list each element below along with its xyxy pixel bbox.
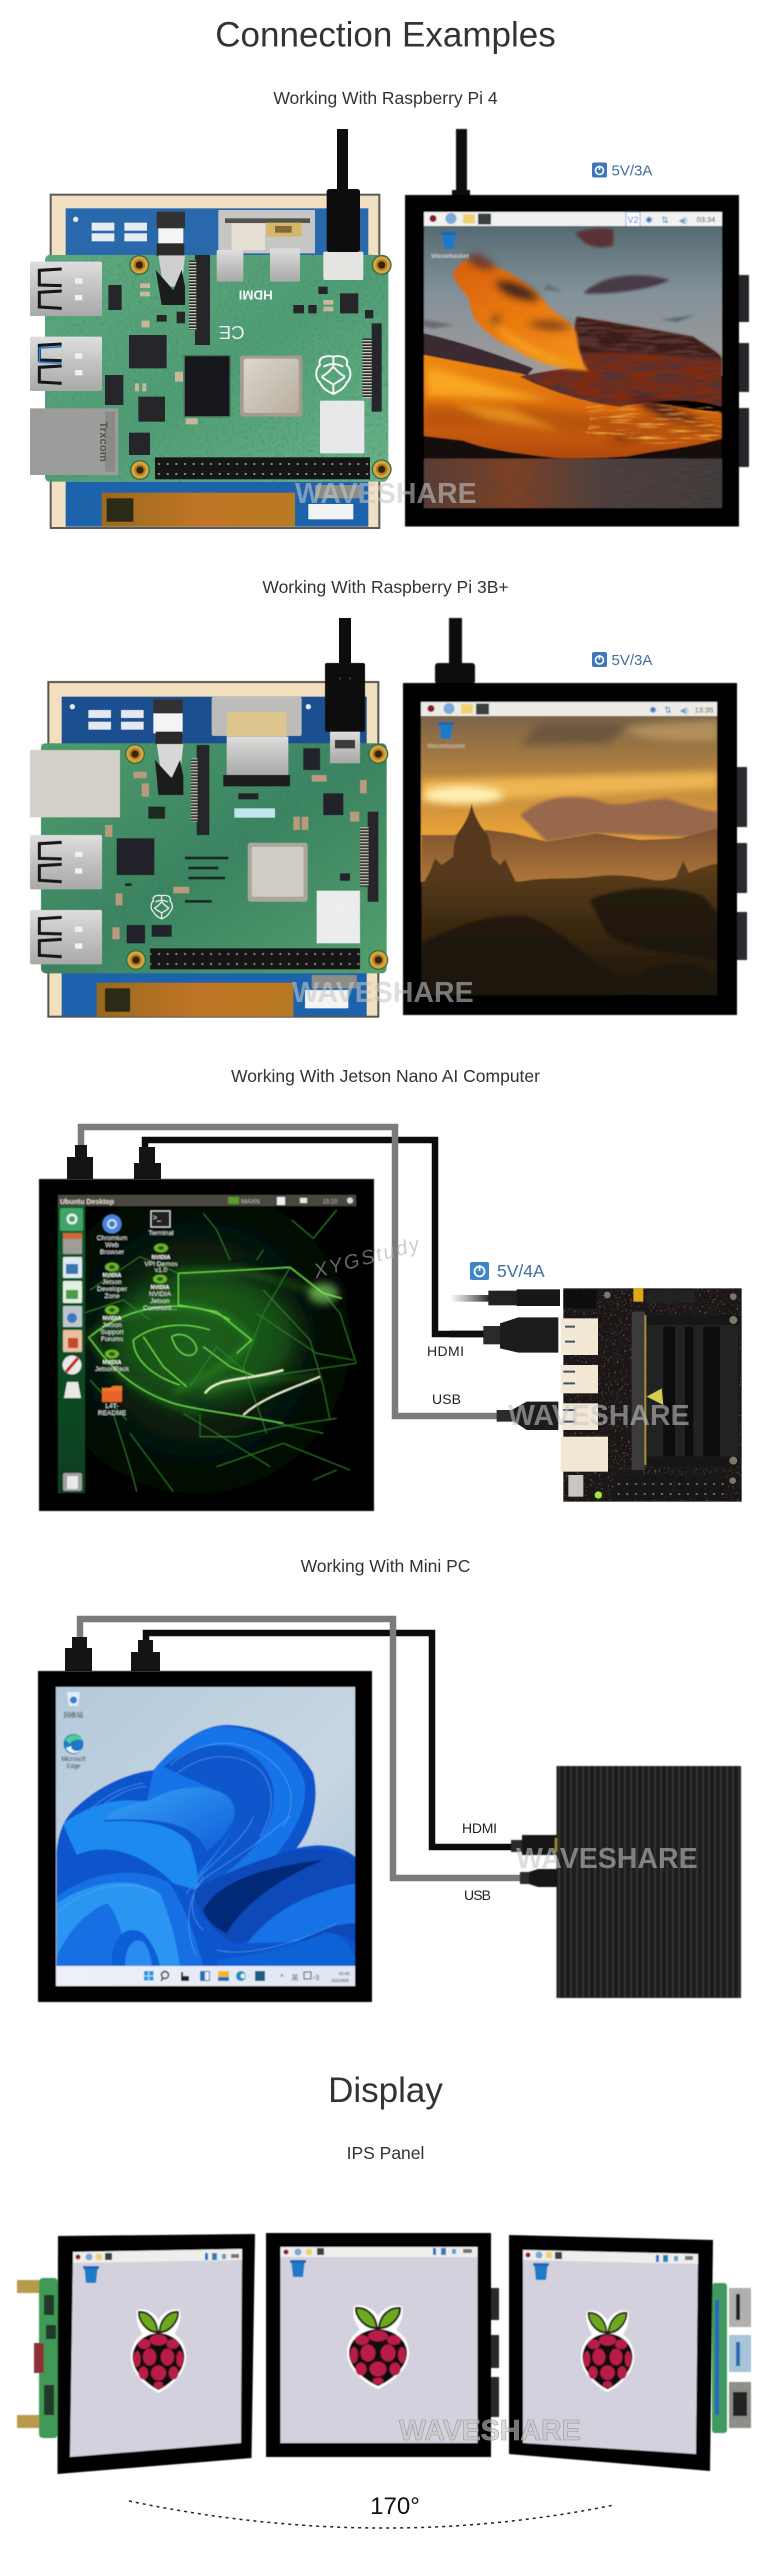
taskbar: ◀) <box>680 706 689 715</box>
terminal icon <box>149 1211 174 1237</box>
SoC <box>248 843 308 902</box>
carrier board bottom <box>62 973 367 1016</box>
support forum icon <box>100 1306 124 1343</box>
inner petal <box>163 1745 274 1890</box>
label HDMI: HDMI <box>427 1343 464 1359</box>
panel: Raspberry Pi 4 mounted on display back <box>30 189 392 528</box>
bright petal <box>103 1788 235 1852</box>
support forum icon: Support <box>100 1329 124 1336</box>
display back frame <box>48 682 378 1017</box>
brown shaded band <box>424 407 722 438</box>
HDMI connector <box>511 1835 557 1855</box>
support forum icon: Forums <box>101 1336 124 1343</box>
chips <box>105 285 373 455</box>
yellow streaks <box>427 367 560 430</box>
support forum icon: NVIDIA <box>103 1316 121 1322</box>
taskbar: ⇅ <box>661 215 669 225</box>
pagoda wallpaper <box>420 715 720 995</box>
dark band cloud <box>423 333 534 376</box>
micro USB cable above the Pi 3B+ board <box>339 618 351 665</box>
ethernet port <box>30 750 120 817</box>
viewing angle label: 170° <box>370 2493 420 2520</box>
USB ports <box>30 262 102 316</box>
panel: centre view <box>266 2233 499 2457</box>
cables: grey USB and black HDMI <box>80 1619 525 1878</box>
terminal icon: Terminal <box>149 1230 174 1237</box>
display FPC connector <box>362 323 382 412</box>
glowing sky <box>420 715 720 882</box>
warning triangle <box>647 1388 663 1405</box>
top bar <box>523 2250 698 2264</box>
community icon: Communi... <box>143 1305 177 1312</box>
HDMI black <box>146 1633 515 1847</box>
USB port 2 <box>30 910 102 964</box>
taskbar: 2022/5/5 <box>331 1978 349 1983</box>
HDMI adapter <box>218 210 315 253</box>
plugs on display <box>65 1637 160 1671</box>
power cable and plug <box>450 1289 560 1306</box>
watermark: WAVESHARE <box>292 977 474 1009</box>
bezel <box>39 1179 374 1511</box>
support forum icon: Jetson <box>102 1322 122 1329</box>
taskbar: V2 <box>627 215 639 225</box>
L4T folder: README <box>98 1410 127 1417</box>
power jack <box>563 1290 597 1308</box>
micro HDMI ports <box>217 248 300 282</box>
sky <box>423 226 723 376</box>
yellow jumper <box>633 1288 643 1302</box>
HDMI black cable <box>145 1140 490 1334</box>
HDMI connector <box>450 1317 558 1353</box>
plugs on display <box>67 1145 161 1179</box>
taskbar: ✱ <box>649 705 657 715</box>
community icon: NVIDIA <box>149 1291 172 1298</box>
side connectors <box>737 767 747 960</box>
Edge icon: Microsoft <box>61 1757 86 1763</box>
GPIO header <box>155 457 370 479</box>
chromium icon <box>97 1214 128 1256</box>
USB-C plug <box>327 189 360 252</box>
USB ports <box>729 2288 751 2428</box>
bar icons <box>284 2248 472 2256</box>
USB ports <box>30 835 102 889</box>
L4T folder <box>98 1386 127 1417</box>
community icon: NVIDIA <box>151 1285 169 1291</box>
FPC chip <box>107 498 133 522</box>
developer zone icon: NVIDIA <box>103 1273 121 1279</box>
bezel <box>266 2233 491 2457</box>
taskbar: 15:40 <box>338 1971 350 1976</box>
icon: power 5V/4A <box>470 1261 545 1281</box>
dashed viewing arc <box>129 2501 614 2528</box>
pads <box>70 704 311 730</box>
mount holes <box>604 1292 737 1484</box>
wallpaper <box>56 1687 355 1967</box>
raspberry logo <box>581 2310 634 2392</box>
sky <box>56 1687 355 1967</box>
taskbar <box>421 702 717 716</box>
taskbar <box>424 212 722 226</box>
Edge icon <box>61 1734 86 1770</box>
white connector <box>305 990 348 1008</box>
fold lines <box>80 1743 291 1930</box>
desktop icon: wastebasket: Wastebasket <box>431 253 469 260</box>
green glow <box>110 1273 297 1400</box>
recycle bin: 回收站 <box>64 1710 84 1719</box>
ethernet port <box>30 408 118 475</box>
power cable <box>452 129 470 196</box>
VPI demos icon: v1.0 <box>155 1267 168 1274</box>
mounting screws <box>129 255 392 480</box>
panel: Jetson Nano board <box>450 1288 742 1502</box>
bezel <box>58 2234 255 2474</box>
taskbar: ^ <box>280 1973 284 1982</box>
Pi 4 green board <box>45 255 388 482</box>
HDMI plug gold and silver <box>223 712 290 786</box>
distant mountains <box>422 828 718 887</box>
gold contact line <box>644 1315 646 1465</box>
chromium icon: Chromium <box>97 1235 128 1242</box>
raspberry logo <box>131 2309 186 2393</box>
small parts <box>105 772 367 939</box>
CE mark: CE <box>219 322 245 343</box>
lower orange blanket <box>424 355 722 458</box>
ethernet port: Trxcom <box>97 422 109 462</box>
wireless shield with logo <box>317 891 360 943</box>
silver adapter <box>212 697 302 736</box>
flexible cable <box>102 493 295 527</box>
big orange cloud <box>453 260 588 371</box>
connector pads <box>73 217 147 241</box>
FPC chip <box>105 988 130 1012</box>
audio jack <box>153 699 183 795</box>
Pi board edge <box>712 2283 727 2433</box>
bezel <box>405 195 739 526</box>
star <box>308 1283 338 1304</box>
panel: Mini PC <box>511 1766 741 1998</box>
lower left ribbons <box>57 1873 203 1967</box>
top bar <box>73 2249 242 2263</box>
L4T folder: L4T- <box>105 1403 119 1410</box>
jetpack icon: NVIDIA <box>103 1360 121 1366</box>
sky tint and clouds <box>422 720 718 803</box>
label USB: USB <box>432 1391 461 1407</box>
thin lines <box>83 1210 356 1492</box>
community icon: Jetson <box>150 1298 170 1305</box>
taskbar: ◀) <box>679 216 688 225</box>
chips <box>117 748 350 943</box>
subheading: Raspberry Pi 3B+: Working With Raspberry Pi 3B+ <box>262 577 509 597</box>
RAM chip <box>184 356 230 417</box>
taskbar: ✱ <box>645 215 653 225</box>
bar icons <box>526 2252 693 2262</box>
lower fold lines <box>57 1877 337 1957</box>
blue edge <box>715 2300 719 2415</box>
subheading: IPS Panel: IPS Panel <box>347 2143 424 2163</box>
panel: display front with sunset wallpaper <box>405 129 749 526</box>
left spiral <box>63 1800 198 1890</box>
board components <box>44 2295 56 2415</box>
micro USB plug <box>325 663 365 763</box>
mountains <box>424 436 722 461</box>
audio jack <box>156 212 185 305</box>
bright light web <box>88 1267 342 1423</box>
USB-C cable above the Pi 4 board <box>337 129 348 191</box>
wastebasket <box>83 2266 99 2283</box>
label HDMI: HDMI <box>462 1820 497 1836</box>
label USB: USB <box>464 1887 491 1903</box>
small clouds <box>424 228 697 328</box>
small parts <box>135 283 333 424</box>
SD card <box>34 2343 44 2373</box>
bar icons <box>76 2253 239 2260</box>
watermark: WAVESHARE <box>516 1843 698 1875</box>
wastebasket <box>290 2260 306 2277</box>
bezel <box>38 1671 372 2002</box>
wallpaper <box>58 1206 356 1493</box>
SODIMM slot <box>632 1312 645 1470</box>
VPI demos icon: VPI Demos <box>144 1261 178 1268</box>
camera FPC connector <box>189 255 210 345</box>
dark dot pads <box>125 807 228 903</box>
wastebasket <box>533 2263 549 2280</box>
top bar <box>58 1195 356 1206</box>
trees <box>422 863 718 995</box>
screen <box>523 2250 698 2454</box>
GPIO header <box>150 948 360 969</box>
Raspberry logo outline <box>316 356 350 394</box>
Pi 3B+ green board <box>41 743 387 973</box>
taskbar: 英 <box>292 1973 298 1982</box>
bezel <box>509 2235 713 2471</box>
USB connector <box>497 1402 558 1430</box>
display connector <box>360 812 378 902</box>
jetpack icon: JetsonPack <box>95 1366 130 1373</box>
cables: USB grey and HDMI black <box>81 1127 505 1416</box>
developer zone icon: Zone <box>104 1293 120 1300</box>
USB grey cable <box>81 1127 505 1416</box>
header pins <box>312 975 357 988</box>
blurred light web <box>90 1271 323 1413</box>
ridged case <box>556 1766 741 1998</box>
dark background <box>58 1206 356 1493</box>
USB-C port <box>323 252 363 280</box>
panel: display front with pagoda sunset wallpaper <box>403 618 747 1015</box>
pale label <box>234 808 275 818</box>
water <box>424 459 722 509</box>
Raspberry logo outline <box>151 895 172 919</box>
icon: power 5V/4A: 5V/4A <box>497 1261 545 1281</box>
bezel <box>403 683 737 1015</box>
developer zone icon <box>97 1262 128 1300</box>
white highlights <box>205 1370 320 1415</box>
desktop icon: wastebasket: Wastebasket <box>427 743 465 750</box>
subheading: Raspberry Pi 4: Working With Raspberry Pi 4 <box>273 88 498 108</box>
taskbar: 03:34 <box>697 215 715 224</box>
USB connector <box>520 1869 557 1887</box>
launcher dock <box>58 1206 85 1493</box>
taskbar <box>56 1966 355 1986</box>
side connectors <box>491 2288 499 2417</box>
small pagoda <box>676 861 689 878</box>
sunset wallpaper <box>423 226 723 509</box>
icon: power 5V/3A <box>592 652 652 669</box>
icon: power 5V/3A: 5V/3A <box>612 162 652 180</box>
taskbar: 13:35 <box>695 706 713 714</box>
dark folds center <box>193 1849 355 1943</box>
desktop icons <box>61 1692 86 1770</box>
desktop icon: wastebasket <box>427 722 465 750</box>
cloud highlight <box>480 303 580 367</box>
terminal icon: >_ <box>153 1215 161 1222</box>
heading: Display: Display <box>328 2071 443 2110</box>
raspberry logo <box>347 2305 409 2389</box>
subheading: Mini PC: Working With Mini PC <box>301 1556 470 1576</box>
taskbar: ◁) <box>313 1975 319 1981</box>
PCB <box>563 1288 742 1502</box>
icon: power 5V/3A <box>592 162 652 180</box>
icon: power 5V/3A: 5V/3A <box>612 652 652 669</box>
upper petal folds <box>147 1726 305 1883</box>
port details <box>563 1327 575 1422</box>
cloud shadows <box>467 254 710 442</box>
cloud streak texture <box>517 313 723 410</box>
camera connector <box>191 745 209 835</box>
Pi board edge <box>39 2278 58 2438</box>
VPI demos icon: NVIDIA <box>152 1255 170 1261</box>
screen <box>280 2247 478 2443</box>
jetpack icon <box>95 1350 130 1373</box>
panel: Raspberry Pi 3B+ mounted on display back <box>30 663 388 1017</box>
dark upper cloud mass <box>576 317 722 360</box>
SoC <box>240 356 302 417</box>
panel: display with Windows desktop <box>38 1671 372 2002</box>
top bar: MAXN <box>241 1198 260 1206</box>
panel: display with NVIDIA desktop <box>39 1179 374 1511</box>
cloud bank <box>520 797 718 842</box>
carrier board top <box>66 208 368 255</box>
developer zone icon: Developer <box>97 1286 128 1293</box>
chromium icon: Browser <box>100 1249 125 1256</box>
striped dark red cloud <box>520 317 722 407</box>
carrier board bottom <box>66 482 368 527</box>
HDMI cable and plug <box>435 618 475 684</box>
panel: left angled view with Pi side <box>17 2234 255 2474</box>
Edge icon: Edge <box>66 1764 81 1770</box>
header pins <box>315 485 360 498</box>
screen <box>70 2249 242 2457</box>
screws <box>125 744 388 970</box>
wireless shield <box>320 401 364 453</box>
standoffs <box>17 2280 39 2428</box>
watermark: WAVESHARE <box>399 2415 581 2447</box>
bloom base <box>57 1725 355 1967</box>
LED <box>595 1491 602 1499</box>
top bar <box>280 2247 478 2257</box>
chromium icon: Web <box>105 1242 119 1249</box>
subheading: Jetson Nano: Working With Jetson Nano AI Computer <box>231 1066 540 1086</box>
desktop icons <box>95 1211 178 1417</box>
micro USB <box>568 1475 583 1497</box>
watermark: WAVESHARE <box>508 1400 690 1432</box>
title: Connection Examples: Connection Examples <box>215 16 556 54</box>
ports <box>561 1318 608 1472</box>
orange streaks <box>584 400 723 444</box>
GPIO area <box>613 1475 725 1500</box>
VPI demos icon <box>144 1244 178 1274</box>
top bar: Ubuntu Desktop <box>60 1199 114 1206</box>
panel: right angled view with Pi side <box>509 2235 751 2471</box>
watermark: XYGStudy: XYGStudy <box>311 1233 423 1283</box>
pagoda silhouette <box>422 803 518 887</box>
developer zone icon: Jetson <box>102 1279 122 1286</box>
display back frame <box>51 195 379 528</box>
board marking HDMI: HDMI <box>239 288 273 303</box>
side connectors <box>739 275 749 467</box>
carrier board top <box>62 697 367 743</box>
top header <box>647 1290 695 1303</box>
USB grey <box>80 1619 525 1878</box>
top bar: 15:20 <box>322 1200 338 1206</box>
flexible cable <box>97 983 293 1017</box>
community icon <box>143 1274 177 1312</box>
sun glare <box>423 786 503 804</box>
dark foreground trees <box>422 888 718 995</box>
heatsink <box>647 1315 738 1467</box>
white connector <box>308 504 353 519</box>
watermark: WAVESHARE <box>295 478 477 510</box>
desktop icon: wastebasket <box>431 232 469 260</box>
taskbar: ⇅ <box>664 705 672 715</box>
USB3 port <box>30 337 102 391</box>
